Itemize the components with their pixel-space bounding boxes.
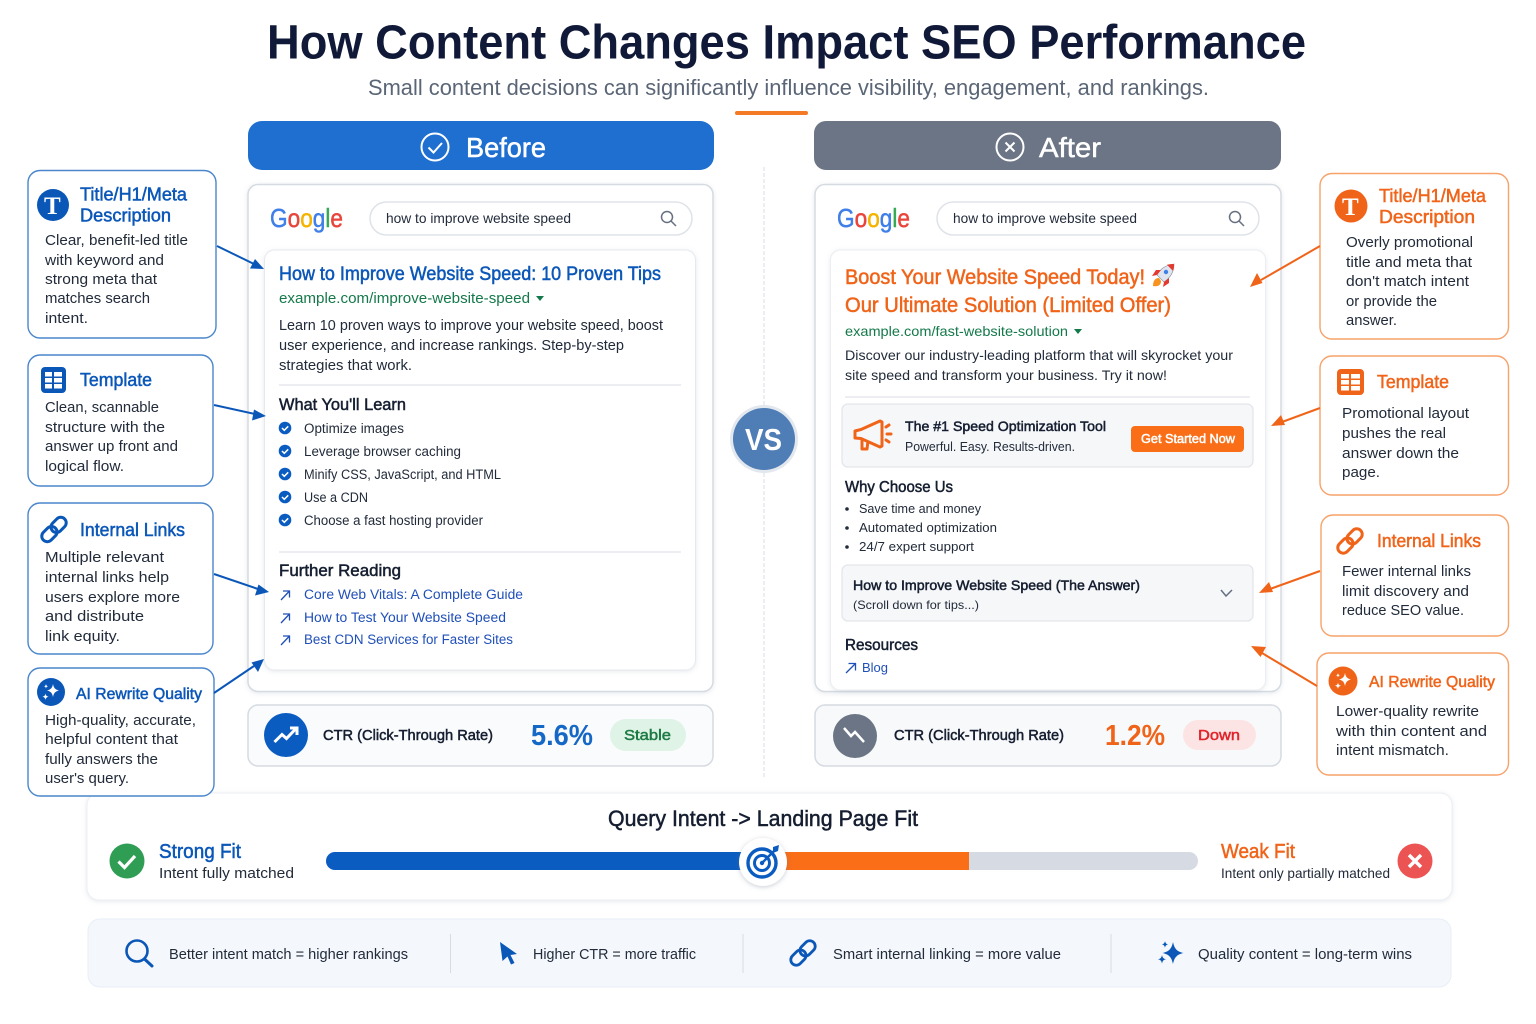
further reading links <box>281 587 523 647</box>
meta description: site speed and transform your business. Try it now! <box>845 367 1167 383</box>
vs badge <box>730 405 798 473</box>
weak fit label: Intent only partially matched <box>1221 865 1390 881</box>
takeaway: quality <box>1158 941 1412 964</box>
takeaway: intent <box>126 940 408 966</box>
accordion <box>842 565 1253 621</box>
button <box>1131 426 1244 452</box>
checklist: Leverage browser caching <box>304 444 461 459</box>
result card <box>830 250 1266 690</box>
bullet list <box>845 501 997 554</box>
callout: after title <box>1320 174 1508 339</box>
strong fit label: Strong Fit <box>159 841 241 863</box>
callout: after ai rewrite: with thin content and <box>1335 724 1487 740</box>
icon: target marker <box>739 838 787 886</box>
callout: before title: matches search <box>45 291 150 307</box>
title: How Content Changes Impact SEO Performance <box>267 16 1306 70</box>
callout: after title: T <box>1342 194 1359 221</box>
resources link <box>846 660 888 675</box>
further reading links: Best CDN Services for Faster Sites <box>304 632 513 647</box>
callout: before ai rewrite: High-quality, accurate, <box>45 713 196 729</box>
metric: after ctr: 1.2% <box>1105 720 1165 752</box>
metric: before ctr: 5.6% <box>531 720 593 752</box>
callout: after internal links: Internal Links <box>1377 531 1481 551</box>
icon: strong fit <box>110 844 144 878</box>
resources heading: Resources <box>845 637 918 654</box>
metric: before ctr <box>248 705 713 766</box>
callout: before template: Clean, scannable <box>45 400 159 416</box>
strong fit label: Intent fully matched <box>159 865 294 882</box>
callout: after ai rewrite: Lower-quality rewrite <box>1336 704 1479 720</box>
header: before: Before <box>466 132 546 163</box>
vs badge: VS <box>745 422 782 457</box>
checklist: Choose a fast hosting provider <box>304 513 483 528</box>
callout: before ai rewrite: helpful content that <box>45 732 178 748</box>
callout: after internal links: Fewer internal links <box>1342 564 1471 580</box>
strong fit label <box>159 841 294 882</box>
metric: before ctr: CTR (Click-Through Rate) <box>323 727 493 744</box>
checklist <box>279 421 501 528</box>
callout: after template: Template <box>1377 372 1449 392</box>
callout: after title: Overly promotional <box>1346 235 1473 251</box>
panel: takeaways <box>88 919 1451 987</box>
google logo: Google <box>837 203 910 233</box>
accordion: How to Improve Website Speed (The Answer) <box>853 577 1140 593</box>
meta description: Discover our industry-leading platform that will skyrocket your <box>845 347 1233 363</box>
callout: after template: Promotional layout <box>1342 406 1469 422</box>
takeaway: links: Smart internal linking = more value <box>833 946 1061 963</box>
takeaway: ctr: Higher CTR = more traffic <box>533 946 696 963</box>
callout: before title: Title/H1/Meta <box>80 184 188 204</box>
callout: before title: strong meta that <box>45 272 157 288</box>
meta description: user experience, and increase rankings. Step-by-step <box>279 338 624 354</box>
google logo: Google <box>270 203 343 233</box>
icon: megaphone <box>855 421 891 449</box>
search box: how to improve website speed <box>953 210 1137 226</box>
callout: after ai rewrite <box>1317 653 1508 775</box>
callout: after title: Description <box>1379 207 1475 227</box>
checklist: Optimize images <box>304 421 404 436</box>
accent bar <box>735 111 808 115</box>
takeaway: quality: Quality content = long-term wins <box>1198 946 1412 963</box>
metric: after ctr: Down <box>1198 727 1240 744</box>
promo banner <box>842 404 1253 467</box>
callout: after title: or provide the <box>1346 294 1437 310</box>
takeaway: ctr <box>500 942 696 964</box>
accordion: (Scroll down for tips...) <box>853 598 979 612</box>
metric: before ctr: Stable <box>624 727 671 744</box>
callout: before internal links: Internal Links <box>80 520 185 540</box>
takeaway: intent: Better intent match = higher rankings <box>169 946 408 963</box>
what you'll learn heading: What You'll Learn <box>279 396 406 414</box>
metric: after ctr <box>815 705 1281 766</box>
further reading links: How to Test Your Website Speed <box>304 610 506 625</box>
button: Get Started Now <box>1141 432 1236 446</box>
icon: rocket <box>1152 264 1174 287</box>
further reading links: Core Web Vitals: A Complete Guide <box>304 587 523 602</box>
callout: before internal links: users explore more <box>45 590 180 606</box>
callout: after internal links: limit discovery and <box>1342 584 1469 600</box>
callout: after template: answer down the <box>1342 446 1459 462</box>
search box: how to improve website speed <box>386 210 571 226</box>
takeaway: links <box>789 939 1061 967</box>
callout: after ai rewrite: intent mismatch. <box>1336 743 1449 759</box>
callout: after template: pushes the real <box>1342 426 1446 442</box>
callout: before internal links <box>28 503 213 654</box>
promo banner: Powerful. Easy. Results-driven. <box>905 440 1075 454</box>
callout: before template: structure with the <box>45 420 165 436</box>
further reading heading: Further Reading <box>279 562 401 580</box>
callout: before title: Description <box>80 206 171 226</box>
arrow: template to checklist <box>214 405 266 420</box>
why choose us heading: Why Choose Us <box>845 479 953 496</box>
result card <box>264 250 696 670</box>
metric: after ctr: CTR (Click-Through Rate) <box>894 727 1064 744</box>
callout: after title: answer. <box>1346 313 1397 329</box>
callout: before template: answer up front and <box>45 439 178 455</box>
result title: Boost Your Website Speed Today! <box>845 266 1145 289</box>
callout: before ai rewrite: fully answers the <box>45 752 158 768</box>
callout: before internal links: internal links help <box>45 570 169 586</box>
callout: before internal links: link equity. <box>45 629 120 645</box>
callout: after title: Title/H1/Meta <box>1379 186 1487 206</box>
arrow: title to result title <box>217 246 264 269</box>
meta description <box>845 347 1233 383</box>
header: after <box>814 121 1281 170</box>
callout: before ai rewrite: AI Rewrite Quality <box>76 686 202 703</box>
fit bar <box>326 852 1198 870</box>
callout: after template <box>1320 356 1508 495</box>
bullet list: 24/7 expert support <box>859 539 974 554</box>
result title: How to Improve Website Speed: 10 Proven Tips <box>279 264 661 285</box>
callout: before template: Template <box>80 370 152 390</box>
callout: after template: page. <box>1342 465 1380 481</box>
checklist: Use a CDN <box>304 490 368 505</box>
callout: after title: don't match intent <box>1346 274 1469 290</box>
header: before <box>248 121 714 170</box>
callout: after internal links <box>1321 515 1508 636</box>
arrow: links to further reading <box>214 574 269 596</box>
meta description <box>279 318 663 374</box>
callout: before internal links: and distribute <box>45 609 144 625</box>
weak fit label: Weak Fit <box>1221 841 1295 863</box>
callout: before internal links: Multiple relevant <box>45 550 164 566</box>
fit heading: Query Intent -> Landing Page Fit <box>608 806 918 831</box>
arrow: after links <box>1259 571 1320 593</box>
callout: after ai rewrite: AI Rewrite Quality <box>1369 674 1495 691</box>
subtitle: Small content decisions can significantly influence visibility, engagement, and rankings. <box>368 75 1209 100</box>
meta description: strategies that work. <box>279 358 412 374</box>
header: after: After <box>1039 132 1101 163</box>
callout: before title: intent. <box>45 311 88 327</box>
search box <box>937 202 1259 235</box>
panel: intent fit <box>87 793 1452 900</box>
resources link: Blog <box>862 660 888 675</box>
icon: weak fit <box>1398 844 1432 878</box>
search box <box>370 202 692 235</box>
bullet list: Save time and money <box>859 501 981 516</box>
panel: before search result <box>248 184 713 692</box>
bullet list: Automated optimization <box>859 520 997 535</box>
callout: before title: with keyword and <box>44 253 164 269</box>
callout: before template <box>28 355 213 486</box>
promo banner: The #1 Speed Optimization Tool <box>905 418 1106 434</box>
arrow: after template <box>1271 408 1320 426</box>
callout: before ai rewrite <box>28 668 214 796</box>
callout: before title: Clear, benefit-led title <box>45 233 188 249</box>
arrow: ai rewrite to card <box>214 659 264 693</box>
result url: example.com/fast-website-solution <box>845 323 1068 339</box>
callout: before title <box>28 170 216 338</box>
result url: example.com/improve-website-speed <box>279 291 530 307</box>
callout: before template: logical flow. <box>45 459 124 475</box>
arrow: after title <box>1250 246 1320 287</box>
callout: after internal links: reduce SEO value. <box>1342 603 1464 619</box>
weak fit label <box>1221 841 1390 881</box>
checklist: Minify CSS, JavaScript, and HTML <box>304 467 501 482</box>
result title: Our Ultimate Solution (Limited Offer) <box>845 294 1171 317</box>
panel: after search result <box>815 184 1281 692</box>
centre divider <box>763 167 765 778</box>
result title <box>845 266 1171 317</box>
callout: before title: T <box>44 193 61 220</box>
callout: before ai rewrite: user's query. <box>45 771 129 787</box>
arrow: after ai rewrite <box>1251 646 1317 686</box>
meta description: Learn 10 proven ways to improve your website speed, boost <box>279 318 663 334</box>
callout: after title: title and meta that <box>1346 255 1472 271</box>
